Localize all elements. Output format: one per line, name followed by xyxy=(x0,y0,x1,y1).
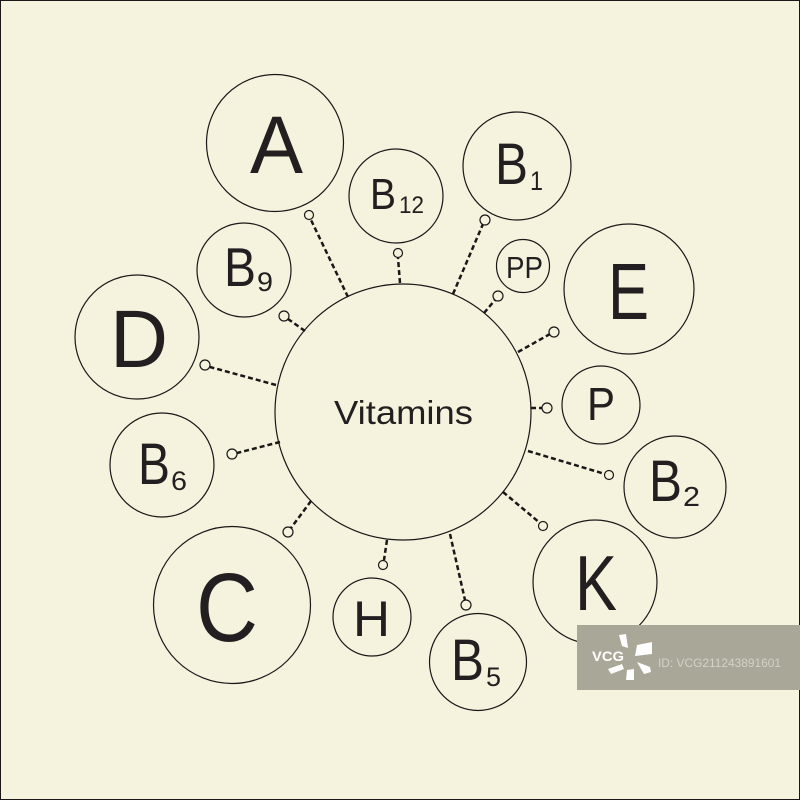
connector C xyxy=(283,501,311,537)
vitamin B5: B xyxy=(451,628,484,693)
vitamin B9: 9 xyxy=(257,267,273,297)
vitamin B9: B xyxy=(224,236,256,298)
connector B12 xyxy=(394,248,402,283)
connector K xyxy=(503,492,548,530)
vitamin B12: B xyxy=(370,170,396,219)
vitamin B5 xyxy=(430,614,526,710)
vitamin K xyxy=(533,520,657,644)
vitamin B6: 6 xyxy=(171,466,187,496)
watermark logo: VCG xyxy=(592,648,624,664)
vitamin K: K xyxy=(575,539,617,627)
vitamin B6: B xyxy=(138,432,170,497)
vitamin B5: 5 xyxy=(486,662,501,692)
vitamin P: P xyxy=(587,378,615,430)
vitamin B1: 1 xyxy=(530,166,543,196)
watermark logo xyxy=(592,634,652,680)
vitamin B1 xyxy=(463,112,571,220)
connector PP xyxy=(484,291,503,313)
connector B9 xyxy=(279,311,305,331)
connector B5 xyxy=(450,534,471,610)
vitamin C xyxy=(154,526,310,684)
vitamin B2: 2 xyxy=(683,481,700,512)
vitamin PP xyxy=(496,240,550,292)
vitamin D: D xyxy=(110,294,168,385)
watermark id: ID: VCG211243891601 xyxy=(658,656,781,670)
vitamin B9 xyxy=(197,223,291,317)
vitamin H: H xyxy=(353,591,390,647)
watermark xyxy=(577,625,800,690)
vitamin H xyxy=(333,578,411,656)
connector A xyxy=(304,210,348,297)
connector D xyxy=(200,360,276,385)
vitamin D xyxy=(75,275,199,399)
vitamin A: A xyxy=(250,100,303,191)
connector B2 xyxy=(528,451,614,480)
vitamin E xyxy=(564,224,694,354)
vitamin B1: B xyxy=(495,132,528,197)
center circle: Vitamins xyxy=(275,284,531,540)
connector P xyxy=(531,403,552,413)
connector B1 xyxy=(453,215,490,294)
vitamin B2 xyxy=(624,436,726,538)
vitamin A xyxy=(206,74,344,212)
connector E xyxy=(518,327,559,352)
vitamin P xyxy=(562,366,640,444)
vitamin B12 xyxy=(349,149,443,243)
connector H xyxy=(378,540,388,570)
vitamin C: C xyxy=(196,553,258,662)
vitamin PP: PP xyxy=(506,250,543,285)
vitamin B12: 12 xyxy=(399,192,424,219)
vitamin E: E xyxy=(608,247,649,336)
vitamin B6 xyxy=(110,413,214,517)
vitamin B2: B xyxy=(649,449,682,514)
center circle: Vitamins: Vitamins xyxy=(334,394,473,431)
connector B6 xyxy=(227,442,280,459)
